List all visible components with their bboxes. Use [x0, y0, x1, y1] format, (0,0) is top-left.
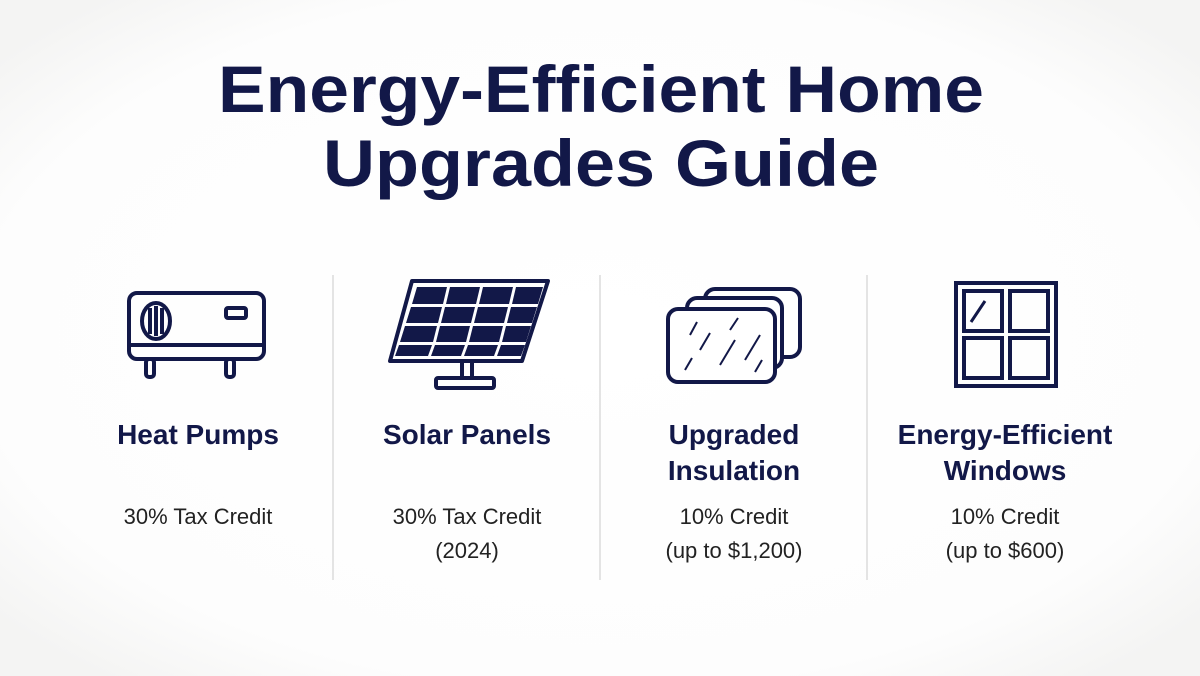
icon: insulation: [668, 289, 800, 382]
column 4 text: Energy-Efficient: [898, 419, 1112, 450]
icon: heat pump: [129, 293, 264, 377]
column 2 text: [383, 419, 551, 563]
column 2 text: (2024): [435, 538, 499, 563]
column 4 text: [898, 419, 1112, 563]
column 1 text: Heat Pumps: [117, 419, 279, 450]
column 2 text: 30% Tax Credit: [393, 504, 541, 529]
column 3 text: [666, 419, 802, 563]
icon: solar panel: [390, 281, 548, 388]
column 2 text: Solar Panels: [383, 419, 551, 450]
column 4 text: Windows: [944, 455, 1066, 486]
title: [218, 52, 984, 200]
column 4 text: (up to $600): [946, 538, 1064, 563]
column 1 text: [117, 419, 279, 529]
title: Upgrades Guide: [323, 126, 879, 200]
title: Energy-Efficient Home: [218, 52, 984, 126]
column 3 text: 10% Credit: [680, 504, 788, 529]
column 3 text: (up to $1,200): [666, 538, 802, 563]
icon: window: [956, 283, 1056, 386]
column 3 text: Upgraded: [669, 419, 799, 450]
column 1 text: 30% Tax Credit: [124, 504, 272, 529]
column 4 text: 10% Credit: [951, 504, 1059, 529]
column 3 text: Insulation: [668, 455, 800, 486]
